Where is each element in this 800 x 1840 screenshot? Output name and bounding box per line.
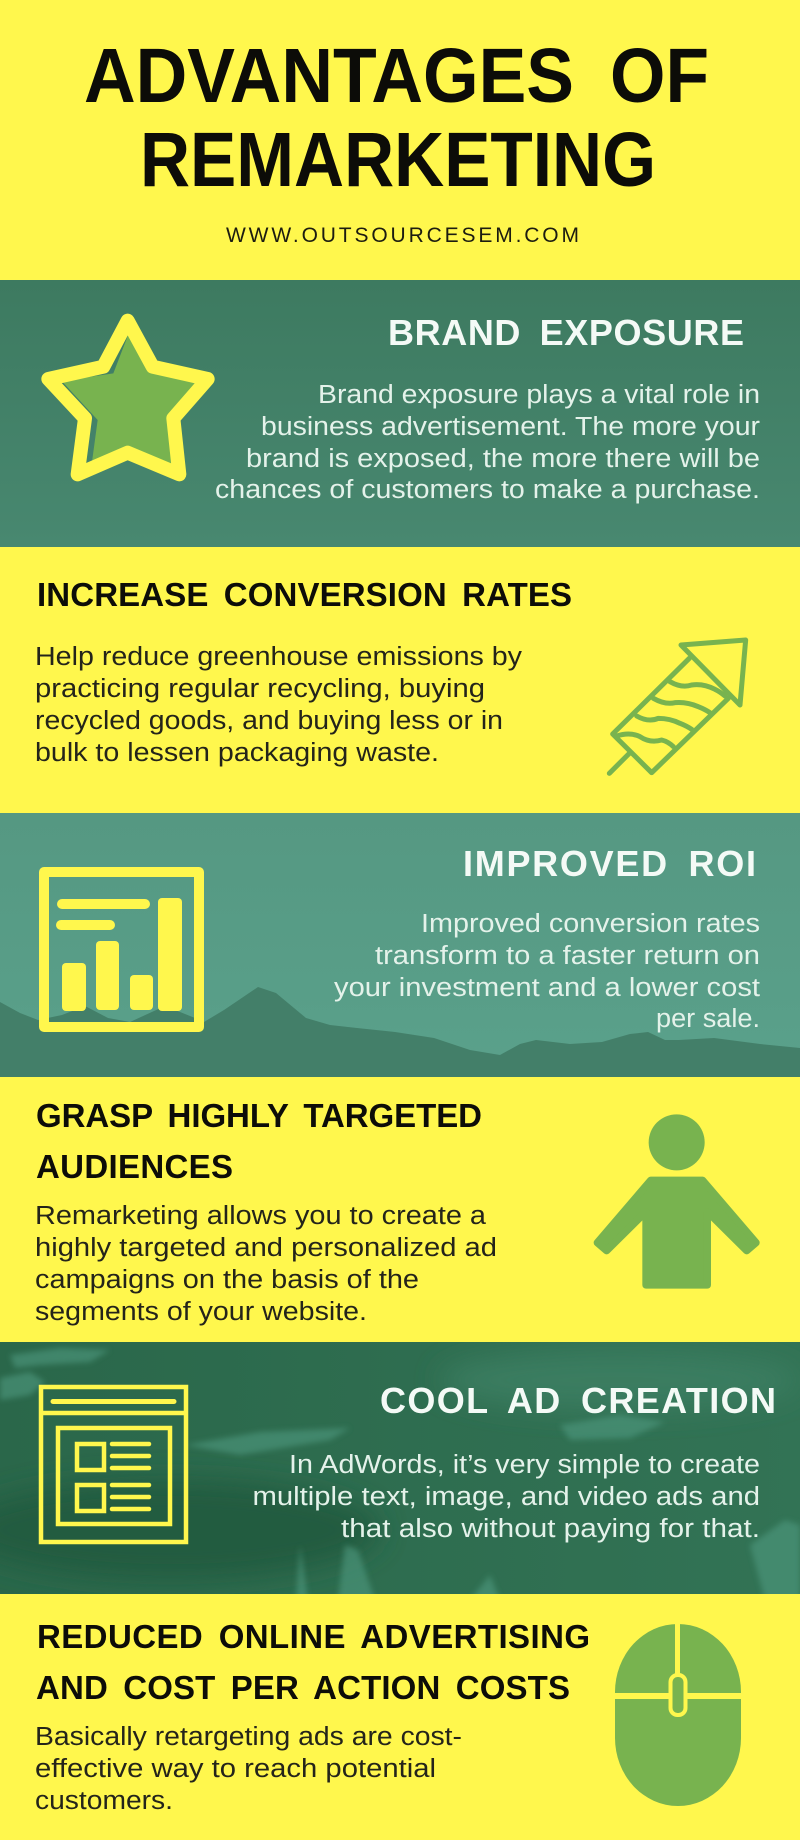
aerial landscape shading: [0, 1348, 800, 1600]
website url: WWW.OUTSOURCESEM.COM: [226, 224, 579, 247]
panel: cool ad creation: [0, 1342, 800, 1600]
panel: improved roi: [0, 813, 800, 1077]
text: cool ad creation body: that also without paying for that.: [341, 1515, 760, 1543]
title: ADVANTAGES: [84, 33, 574, 119]
icon: bar chart report: [44, 872, 199, 1027]
text: cool ad creation body: multiple text, image, and video ads and: [252, 1483, 760, 1511]
heading: grasp highly targeted audiences: [36, 1097, 482, 1185]
heading: grasp highly targeted audiences: GRASP HIGHLY TARGETED: [36, 1097, 482, 1134]
text: brand exposure body: brand is exposed, the more there will be: [246, 445, 760, 473]
heading: increase conversion rates: INCREASE CONVERSION RATES: [37, 576, 572, 613]
text: conversion body: Help reduce greenhouse emissions by: [35, 643, 522, 671]
panel: reduced online advertising: [35, 1618, 741, 1815]
panel: grasp highly targeted audiences: [35, 1097, 756, 1326]
text: brand exposure body: [215, 381, 761, 504]
heading: reduced online advertising: REDUCED ONLINE ADVERTISING: [37, 1618, 590, 1655]
text: brand exposure body: Brand exposure plays a vital role in: [318, 381, 760, 409]
panel: brand exposure: [0, 280, 800, 547]
text: audiences body: segments of your website.: [35, 1298, 367, 1326]
text: brand exposure body: business advertisement. The more your: [261, 413, 761, 441]
text: cool ad creation body: [252, 1451, 760, 1543]
icon: star: [48, 321, 208, 474]
text: conversion body: practicing regular recycling, buying: [35, 675, 485, 703]
text: cost body: Basically retargeting ads are cost-: [35, 1723, 462, 1751]
title: [84, 33, 709, 203]
text: conversion body: bulk to lessen packaging waste.: [35, 739, 439, 767]
text: cost body: effective way to reach potential: [35, 1755, 436, 1783]
text: conversion body: [35, 643, 522, 767]
text: audiences body: Remarketing allows you to create a: [35, 1202, 487, 1230]
text: cost body: customers.: [35, 1787, 173, 1815]
text: cost body: [35, 1723, 462, 1815]
text: cool ad creation body: In AdWords, it’s very simple to create: [289, 1451, 760, 1479]
icon: person: [597, 1114, 756, 1285]
icon: firework rocket: [609, 640, 746, 773]
heading: reduced online advertising: [36, 1618, 590, 1706]
text: conversion body: recycled goods, and buying less or in: [35, 707, 503, 735]
icon: computer mouse: [615, 1624, 741, 1806]
text: improved roi body: your investment and a lower cost: [334, 974, 760, 1002]
panel: increase conversion rates: [35, 576, 746, 773]
text: audiences body: [35, 1202, 497, 1326]
heading: reduced online advertising: AND COST PER ACTION COSTS: [36, 1669, 570, 1706]
text: improved roi body: [334, 910, 760, 1033]
heading: grasp highly targeted audiences: AUDIENCES: [36, 1148, 233, 1185]
text: improved roi body: per sale.: [656, 1005, 760, 1033]
heading: cool ad creation: COOL AD CREATION: [380, 1380, 776, 1421]
text: improved roi body: transform to a faster return on: [375, 942, 760, 970]
text: brand exposure body: chances of customers to make a purchase.: [215, 476, 760, 504]
mountain silhouette: [0, 987, 800, 1077]
text: audiences body: campaigns on the basis of the: [35, 1266, 419, 1294]
text: improved roi body: Improved conversion rates: [421, 910, 760, 938]
title: REMARKETING: [140, 117, 656, 203]
title: OF: [610, 33, 709, 119]
icon: web page layout: [41, 1387, 186, 1542]
heading: brand exposure: BRAND EXPOSURE: [388, 312, 744, 353]
heading: improved roi: IMPROVED ROI: [463, 843, 756, 884]
text: audiences body: highly targeted and personalized ad: [35, 1234, 497, 1262]
